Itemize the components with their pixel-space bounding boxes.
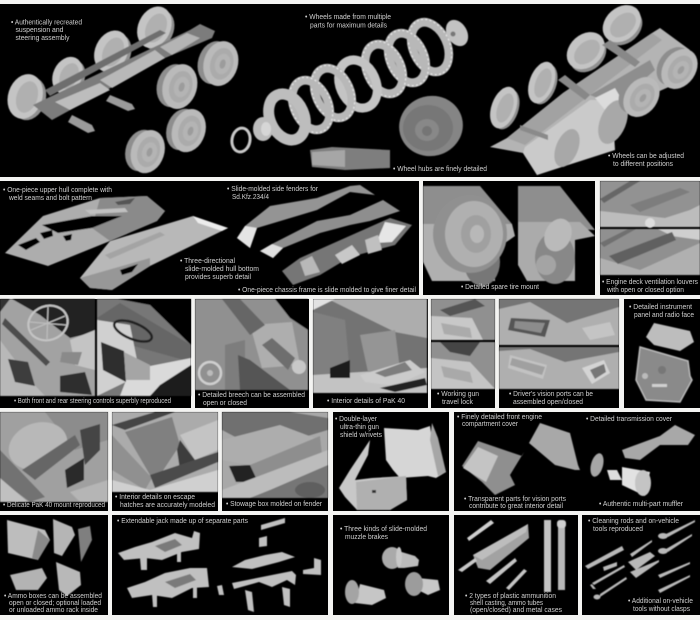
banner captions: steering assembly bbox=[16, 35, 70, 42]
stowage image bbox=[222, 412, 328, 498]
caption bbox=[340, 526, 427, 541]
chassis frame bbox=[282, 218, 412, 285]
side fenders bbox=[237, 185, 400, 258]
tools bbox=[585, 520, 695, 600]
front engine cover bbox=[529, 423, 580, 470]
captions: • Cleaning rods and on-vehicle bbox=[588, 518, 679, 525]
banner captions: • Authentically recreated bbox=[11, 20, 82, 26]
captions: tools reproduced bbox=[593, 526, 643, 533]
ports closed bbox=[499, 347, 619, 389]
panel: instrument panel bbox=[624, 299, 700, 408]
caption bbox=[629, 304, 694, 319]
caption: • Delicate PaK 40 mount reproduced bbox=[3, 502, 105, 509]
caption bbox=[465, 593, 562, 614]
hull captions: • One-piece upper hull complete with bbox=[3, 187, 112, 194]
captions: • Detailed transmission cover bbox=[586, 416, 673, 423]
banner captions: to different positions bbox=[613, 161, 673, 168]
breech image bbox=[195, 299, 308, 390]
panel: vision ports bbox=[499, 299, 619, 408]
panel: ammunition bbox=[454, 515, 578, 615]
caption: • Extendable jack made up of separate parts bbox=[117, 518, 248, 525]
panel: gun travel lock bbox=[431, 299, 495, 408]
caption bbox=[4, 593, 102, 614]
caption: • Interior details on escape bbox=[115, 494, 195, 501]
transparent port parts bbox=[462, 441, 524, 495]
panel: PaK 40 mount bbox=[0, 412, 108, 511]
tire tread and hub face bbox=[310, 89, 470, 170]
panel: cleaning rods and tools bbox=[582, 515, 700, 615]
chassis with wheels bbox=[2, 1, 244, 133]
captions: • Additional on-vehicle bbox=[628, 598, 693, 605]
banner captions: • Wheels can be adjusted bbox=[608, 153, 684, 160]
panel: suspension and wheels banner bbox=[0, 0, 700, 178]
caption bbox=[335, 416, 382, 439]
ports open bbox=[499, 299, 619, 345]
hull captions: provides superb detail bbox=[185, 274, 251, 281]
radio face bbox=[646, 323, 694, 351]
caption: (open/closed) and metal cases bbox=[470, 607, 562, 614]
caption: • Driver's vision ports can be bbox=[509, 391, 593, 398]
panel: breech bbox=[195, 299, 309, 408]
upper hull bbox=[5, 196, 165, 266]
caption: hatches are accurately modeled bbox=[120, 502, 215, 509]
panel: extendable jack bbox=[112, 515, 328, 615]
loose wheels bbox=[120, 103, 211, 178]
panel: PaK 40 interior bbox=[313, 299, 428, 408]
panel: hull parts bbox=[0, 181, 419, 295]
caption: • 2 types of plastic ammunition bbox=[465, 593, 556, 600]
panel: escape hatches bbox=[112, 412, 218, 511]
hull captions: weld seams and bolt pattern bbox=[8, 195, 92, 202]
captions: • Transparent parts for vision ports bbox=[464, 496, 566, 503]
caption: • Detailed breech can be assembled bbox=[198, 392, 305, 399]
caption: • Three kinds of slide-molded bbox=[340, 526, 427, 533]
instrument panel bbox=[636, 347, 692, 402]
lock closed and open bbox=[431, 299, 495, 389]
caption: • Stowage box molded on fender bbox=[226, 501, 323, 508]
hull captions bbox=[3, 186, 416, 294]
hull captions: • One-piece chassis frame is slide molded to give finer detail bbox=[238, 287, 416, 294]
banner captions: • Wheels made from multiple bbox=[305, 14, 391, 21]
hull captions: • Three-directional bbox=[180, 258, 235, 265]
hull bottom bbox=[80, 216, 228, 290]
hull captions: Sd.Kfz.234/4 bbox=[232, 194, 269, 201]
captions: contribute to great interior detail bbox=[469, 503, 563, 510]
captions bbox=[457, 414, 684, 510]
caption bbox=[198, 392, 305, 407]
louvers closed bbox=[600, 181, 700, 228]
louvers open bbox=[600, 229, 700, 275]
shield plates bbox=[339, 423, 446, 510]
panel: gun shield bbox=[333, 412, 449, 511]
caption: or unloaded ammo rack inside bbox=[9, 607, 98, 614]
caption: shell casting, ammo tubes bbox=[470, 600, 543, 607]
spare tire removed bbox=[518, 186, 595, 284]
captions: compartment cover bbox=[462, 421, 519, 428]
panel: engine deck louvers bbox=[600, 181, 700, 295]
caption: panel and radio face bbox=[634, 312, 694, 319]
caption: • Working gun bbox=[437, 391, 479, 398]
panel: steering controls bbox=[0, 299, 191, 408]
muffler bbox=[588, 452, 651, 496]
front steering bbox=[0, 299, 95, 396]
caption: ultra-thin gun bbox=[340, 424, 379, 431]
panel: muzzle brakes bbox=[333, 515, 449, 615]
caption: assembled open/closed bbox=[513, 399, 583, 406]
assembled jacks bbox=[118, 531, 209, 607]
caption bbox=[602, 279, 698, 294]
caption: • Engine deck ventilation louvers bbox=[602, 279, 698, 286]
caption: • Detailed spare tire mount bbox=[461, 284, 539, 291]
caption: • Ammo boxes can be assembled bbox=[4, 593, 102, 600]
hull captions: slide-molded hull bottom bbox=[185, 266, 259, 273]
banner captions: suspension and bbox=[16, 27, 64, 34]
caption bbox=[509, 391, 593, 406]
captions: • Finely detailed front engine bbox=[457, 414, 542, 421]
captions: • Authentic multi-part muffler bbox=[599, 501, 684, 508]
exploded wheel parts bbox=[230, 12, 473, 153]
rear steering bbox=[97, 299, 191, 396]
caption bbox=[115, 494, 215, 509]
mount image bbox=[0, 412, 108, 502]
caption: open or closed; optional loaded bbox=[9, 600, 101, 607]
caption: with open or closed option bbox=[606, 287, 684, 294]
caption: open or closed bbox=[203, 400, 247, 407]
brake parts bbox=[345, 547, 440, 605]
hatch image bbox=[112, 412, 218, 492]
banner captions: parts for maximum details bbox=[310, 22, 387, 30]
ammo box parts bbox=[7, 519, 92, 596]
hull captions: • Slide-molded side fenders for bbox=[227, 186, 319, 193]
spare tire closed bbox=[423, 186, 515, 286]
panel: spare tire mount bbox=[423, 181, 595, 295]
panel: ammo boxes bbox=[0, 515, 108, 615]
caption bbox=[437, 391, 479, 406]
banner captions bbox=[11, 14, 684, 173]
separate jack parts bbox=[217, 518, 321, 612]
transmission cover bbox=[622, 425, 695, 460]
captions bbox=[588, 518, 693, 613]
banner captions: • Wheel hubs are finely detailed bbox=[393, 166, 487, 173]
panel: stowage box bbox=[222, 412, 328, 511]
caption: shield w/rivets bbox=[340, 432, 382, 439]
caption: muzzle brakes bbox=[345, 534, 388, 541]
inverted hull with wheels bbox=[485, 0, 700, 175]
interior image bbox=[313, 299, 427, 393]
caption: • Both front and rear steering controls superbly reproduced bbox=[14, 398, 171, 405]
captions: tools without clasps bbox=[633, 606, 690, 613]
shells and ammo tubes bbox=[458, 520, 566, 592]
caption: • Detailed instrument bbox=[629, 304, 692, 311]
caption: travel lock bbox=[442, 399, 473, 406]
caption: • Double-layer bbox=[335, 416, 378, 423]
caption: • Interior details of PaK 40 bbox=[327, 398, 405, 405]
panel: engine cover, transmission, muffler bbox=[454, 412, 700, 511]
